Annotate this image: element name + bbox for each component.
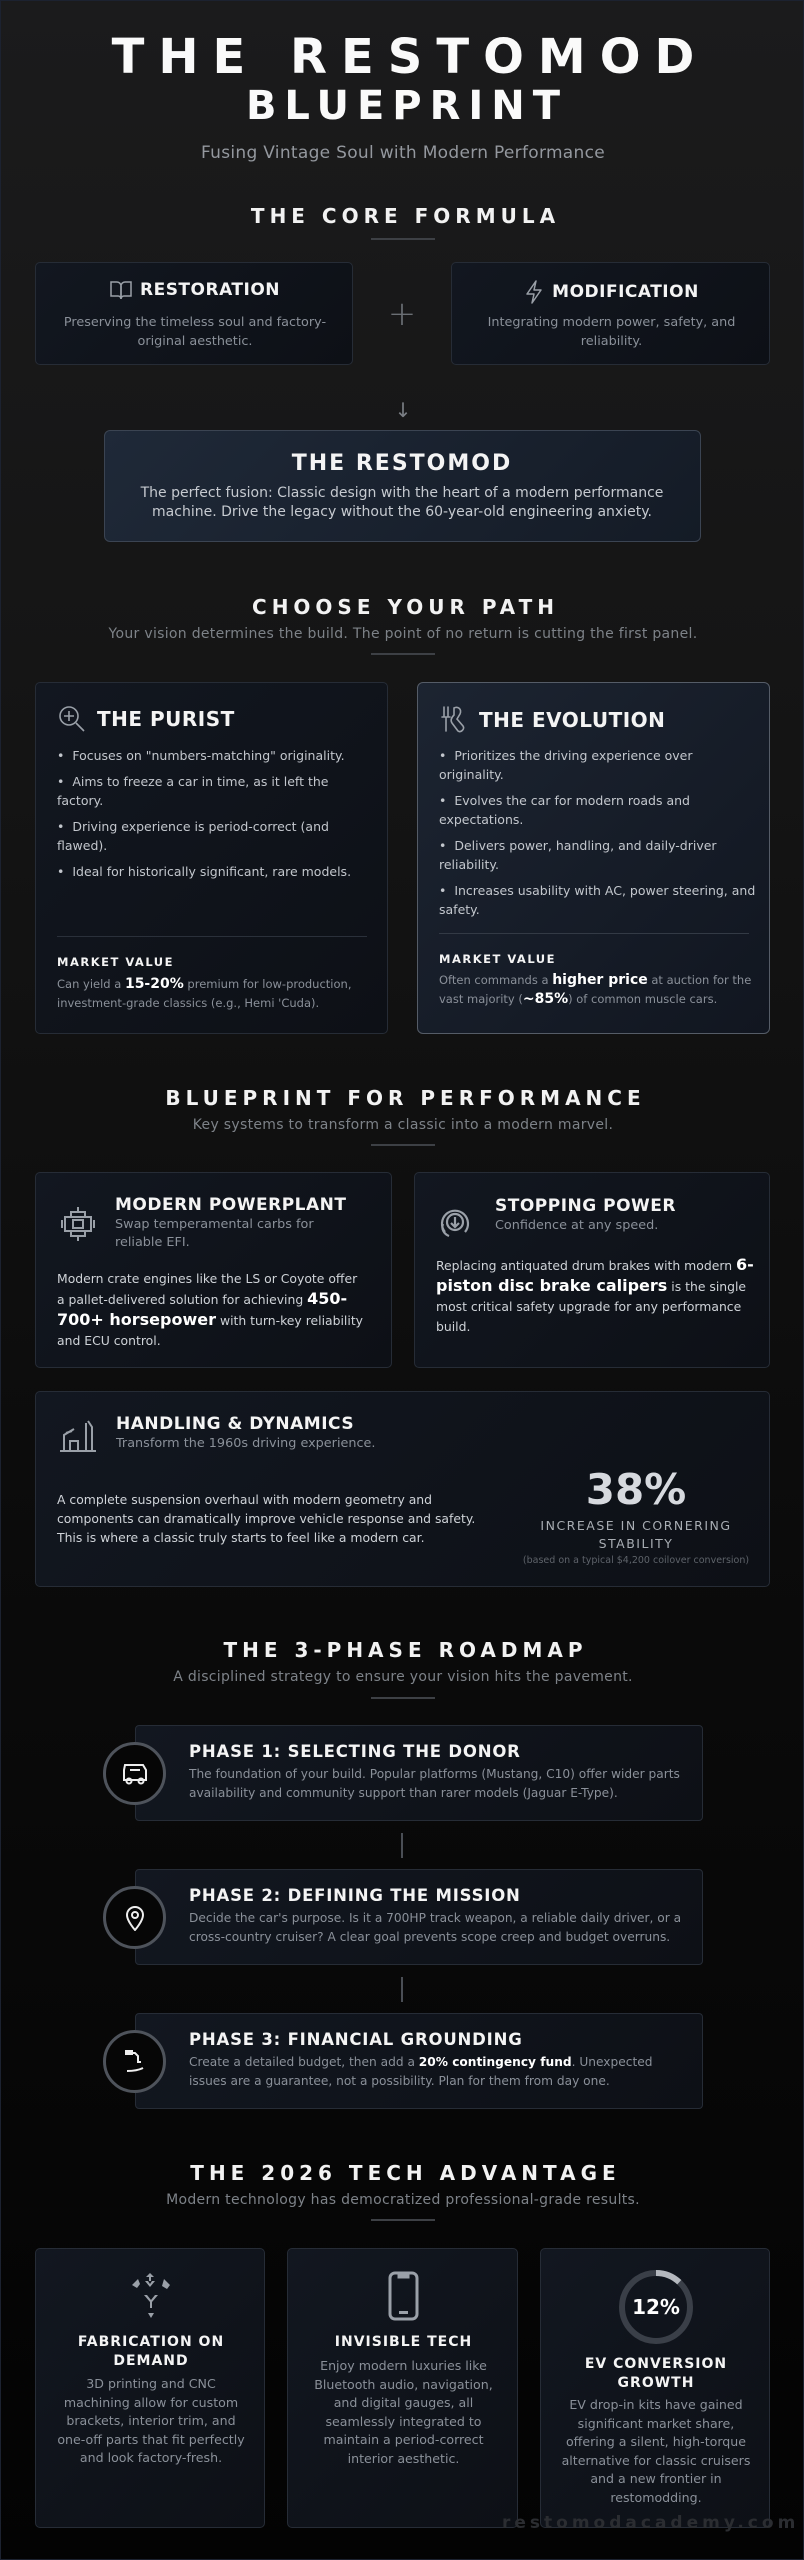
fabrication text: 3D printing and CNC machining allow for custom brackets, interior trim, and one-off parts that fit perfectly and look factory-fresh.: [57, 2376, 245, 2465]
stopping title: STOPPING POWER: [495, 1196, 676, 1216]
purist market value: Can yield a 15-20% premium for low-production, investment-grade classics (e.g., Hemi 'Cuda).: [57, 976, 351, 1010]
powerplant title: MODERN POWERPLANT: [115, 1195, 346, 1215]
handling title: HANDLING & DYNAMICS: [116, 1414, 354, 1434]
stopping title: Confidence at any speed.: [495, 1218, 658, 1233]
icon: location circle: [103, 1886, 166, 1949]
evolution bullets: [439, 748, 755, 917]
icon: plus: +: [388, 294, 416, 334]
title: BLUEPRINT: [246, 83, 568, 129]
donut chart: 12%: [619, 2270, 693, 2344]
heading: blueprint for performance: BLUEPRINT FOR PERFORMANCE: [165, 1086, 646, 1110]
icon: phone: [388, 2272, 418, 2320]
watermark: restomodacademy.com: [502, 2513, 799, 2533]
panel: ev conversion: [540, 2248, 770, 2528]
connector: [401, 1977, 403, 2002]
purist bullets: • Ideal for historically significant, rare models.: [57, 864, 351, 879]
purist bullets: • Aims to freeze a car in time, as it left the factory.: [57, 774, 328, 808]
phase 2 text: [189, 1886, 681, 1944]
restomod title: THE RESTOMOD: [292, 451, 512, 476]
panel: modern powerplant: [35, 1172, 392, 1368]
heading: choose your path: CHOOSE YOUR PATH: [252, 595, 559, 619]
stopping title: [495, 1196, 676, 1233]
subtitle: Fusing Vintage Soul with Modern Performance: [201, 143, 605, 163]
purist bullets: [57, 748, 351, 879]
stopping body: Replacing antiquated drum brakes with modern 6-piston disc brake calipers is the single most critical safety upgrade for any performance build.: [436, 1255, 754, 1334]
subheading: performance: Key systems to transform a classic into a modern marvel.: [193, 1117, 613, 1133]
evolution bullets: • Prioritizes the driving experience over originality.: [439, 748, 692, 782]
phase 2 text: PHASE 2: DEFINING THE MISSION: [189, 1886, 521, 1905]
heading: core formula: THE CORE FORMULA: [251, 204, 560, 228]
subheading: roadmap: A disciplined strategy to ensure your vision hits the pavement.: [173, 1669, 633, 1685]
icon: engine: [61, 1207, 95, 1241]
evolution market value: MARKET VALUE: [439, 952, 556, 966]
stat: 38%: [523, 1465, 749, 1566]
powerplant body: Modern crate engines like the LS or Coyote offer a pallet-delivered solution for achieving 450-700+ horsepower with turn-key reliability and ECU control.: [57, 1271, 363, 1348]
evolution bullets: • Evolves the car for modern roads and expectations.: [439, 793, 690, 827]
restomod text: The perfect fusion: Classic design with the heart of a modern performance machine. Drive the legacy without the 60-year-old engineering anxiety.: [141, 485, 663, 520]
phase 1 text: [188, 1742, 680, 1800]
icon: money circle: [103, 2030, 166, 2093]
stat: 38%: (based on a typical $4,200 coilover conversion): [523, 1555, 749, 1566]
arrow: down: ↓: [395, 398, 411, 422]
phase 1 text: The foundation of your build. Popular platforms (Mustang, C10) offer wider parts availability and community support than rarer models (Jaguar E-Type).: [189, 1767, 680, 1800]
stat: 38%: STABILITY: [599, 1536, 673, 1551]
icon: fabrication: [132, 2273, 170, 2318]
fabrication title: FABRICATION ON DEMAND: [78, 2334, 224, 2369]
title: [112, 29, 708, 129]
phase 2: [103, 1869, 703, 1965]
phase 3 text: PHASE 3: FINANCIAL GROUNDING: [189, 2030, 523, 2049]
icon: brake: [440, 1210, 470, 1237]
panel: modification: [451, 262, 770, 365]
handling body: A complete suspension overhaul with modern geometry and components can dramatically improve vehicle response and safety. This is where a classic truly starts to feel like a modern car.: [57, 1492, 475, 1545]
purist bullets: • Driving experience is period-correct (and flawed).: [57, 819, 329, 853]
panel: stopping power: [414, 1172, 770, 1368]
powerplant title: Swap temperamental carbs for reliable EFI.: [115, 1217, 314, 1250]
evolution bullets: • Delivers power, handling, and daily-driver reliability.: [439, 838, 717, 872]
title: THE RESTOMOD: [112, 29, 708, 85]
phase 3: [103, 2013, 703, 2109]
panel: the purist: [35, 682, 388, 1034]
invisible tech text: Enjoy modern luxuries like Bluetooth audio, navigation, and digital gauges, all seamlessly integrated to maintain a period-correct interior aesthetic.: [314, 2358, 493, 2466]
heading: roadmap: THE 3-PHASE ROADMAP: [223, 1638, 588, 1662]
evolution bullets: • Increases usability with AC, power steering, and safety.: [439, 883, 755, 917]
invisible tech title: INVISIBLE TECH: [335, 2334, 472, 2350]
handling title: Transform the 1960s driving experience.: [116, 1436, 375, 1451]
panel: the restomod: [104, 430, 701, 542]
evolution market value: [439, 952, 751, 1007]
ev text: EV drop-in kits have gained significant market share, offering a silent, high-torque alternative for classic cruisers and a new frontier in restomodding.: [562, 2397, 750, 2504]
phase 1: [103, 1725, 703, 1821]
powerplant title: [115, 1195, 346, 1250]
evolution heading with icon: THE EVOLUTION: [479, 708, 665, 732]
phase 3 text: [189, 2030, 652, 2088]
panel: restoration: [35, 262, 353, 365]
heading: tech advantage: THE 2026 TECH ADVANTAGE: [190, 2161, 621, 2185]
ev title: EV CONVERSION GROWTH: [585, 2356, 727, 2391]
restoration heading with book icon: RESTORATION: [140, 280, 280, 300]
panel: invisible tech: [287, 2248, 518, 2528]
modification heading with bolt icon: MODIFICATION: [552, 282, 699, 302]
purist market value: MARKET VALUE: [57, 955, 174, 969]
phase 1 text: PHASE 1: SELECTING THE DONOR: [189, 1742, 521, 1761]
restoration description: Preserving the timeless soul and factory-original aesthetic.: [64, 315, 326, 348]
subheading: choose your path: Your vision determines the build. The point of no return is cutting the first panel.: [109, 626, 697, 642]
evolution market value: Often commands a higher price at auction for the vast majority (~85%) of common muscle cars.: [439, 972, 751, 1007]
stat: 38%: INCREASE IN CORNERING: [540, 1518, 732, 1533]
subheading: tech: Modern technology has democratized professional-grade results.: [166, 2192, 640, 2208]
icon: suspension: [60, 1420, 96, 1452]
purist heading with magnifier icon: THE PURIST: [97, 707, 235, 731]
connector: [401, 1833, 403, 1858]
icon: car circle: [103, 1742, 166, 1805]
phase 2 text: Decide the car's purpose. Is it a 700HP track weapon, a reliable daily driver, or a cross-country cruiser? A clear goal prevents scope creep and budget overruns.: [189, 1911, 681, 1944]
donut chart: 12%: 12%: [632, 2295, 680, 2319]
purist market value: [57, 955, 351, 1010]
purist bullets: • Focuses on "numbers-matching" originality.: [57, 748, 345, 763]
modification description: Integrating modern power, safety, and reliability.: [488, 315, 735, 348]
panel: the evolution: [417, 682, 770, 1034]
panel: fabrication: [35, 2248, 265, 2528]
panel: handling & dynamics: [35, 1391, 770, 1587]
phase 3 text: Create a detailed budget, then add a 20% contingency fund. Unexpected issues are a guarantee, not a possibility. Plan for them from day one.: [189, 2055, 652, 2088]
handling title: [116, 1414, 375, 1451]
stat: 38%: 38%: [586, 1465, 686, 1514]
